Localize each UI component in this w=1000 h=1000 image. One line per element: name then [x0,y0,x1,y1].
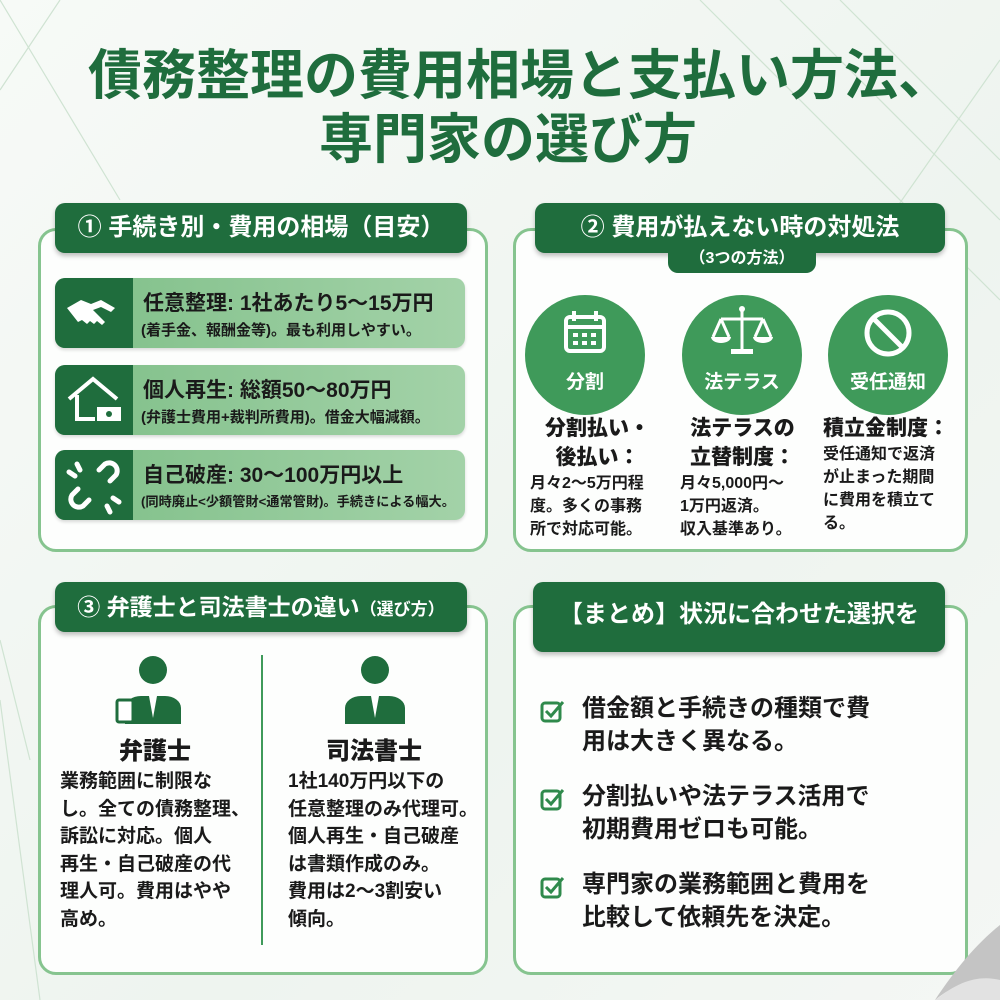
text: 分割払い: 月々2〜5万円程 [530,475,644,492]
checklist item 1: 借金額と手続きの種類で費 [582,695,870,722]
icon: 法テラス: 法テラス [704,372,780,393]
text: 弁護士: し。全ての債務整理、 [60,798,250,820]
row: 個人再生 [55,365,465,435]
text: 法テラス: 1万円返済。 [680,498,769,515]
checklist item 3 [540,871,870,931]
heading 2 [535,203,945,253]
title: 専門家の選び方 [319,110,697,170]
heading 3: ③ 弁護士と司法書士の違い（選び方） [77,594,445,620]
panel: cannot pay [513,228,968,552]
checklist item 2: 分割払いや法テラス活用で [582,783,870,810]
text: 法テラス: 法テラスの [690,417,795,440]
row: 個人再生: 個人再生: 総額50〜80万円 [143,379,392,402]
icon: 受任通知 [828,295,948,415]
text: 弁護士: 理人可。費用はやや [60,881,231,902]
text: 積立金: る。 [823,515,855,532]
checklist item 1 [540,695,870,755]
heading 2 sub tab: （3つの方法） [690,250,794,267]
row: 自己破産: 自己破産: 30〜100万円以上 [143,464,403,487]
row: 個人再生: (弁護士費用+裁判所費用)。借金大幅減額。 [141,409,430,426]
text: 法テラス: 立替制度： [690,446,795,469]
text: 弁護士: 再生・自己破産の代 [60,854,231,874]
icon: scrivener [345,656,405,724]
text: 法テラス: 月々5,000円〜 [680,475,784,492]
text: 司法書士: 費用は2〜3割安い [288,881,442,902]
icon: 法テラス [682,295,802,415]
checklist item 2: 初期費用ゼロも可能。 [582,816,822,843]
divider [261,655,263,945]
text: 分割払い: 所で対応可能。 [530,521,642,538]
title [88,46,952,170]
panel: cost by procedure [38,228,488,552]
text: 弁護士: 訴訟に対応。個人 [60,826,212,847]
icon: 分割 [525,295,645,415]
checklist item 3: 専門家の業務範囲と費用を [582,871,870,898]
text: 積立金 [823,416,949,532]
text: 司法書士: 1社140万円以下の [288,771,444,792]
heading 1 [55,203,467,253]
text: 司法書士: 傾向。 [288,908,345,930]
text: 積立金: が止まった期間 [823,469,934,486]
text: 弁護士: 弁護士 [119,738,191,765]
heading 4 [533,582,945,652]
heading 3 [55,582,467,632]
text: 弁護士: 業務範囲に制限な [60,771,212,792]
text: 法テラス [680,416,795,538]
row: 自己破産: (同時廃止<少額管財<通常管財)。手続きによる幅大。 [141,494,455,509]
text: 司法書士: は書類作成のみ。 [288,854,440,874]
page curl [935,925,1000,1000]
heading 1: ① 手続き別・費用の相場（目安） [78,214,444,241]
text: 分割払い: 度。多くの事務 [530,498,642,515]
row: 自己破産 [55,450,465,520]
row: 任意整理 [55,278,465,348]
row: 任意整理: 任意整理: 1社あたり5〜15万円 [143,292,434,315]
row: 任意整理: (着手金、報酬金等)。最も利用しやすい。 [141,322,421,339]
text: 分割払い: 分割払い・ [545,417,650,440]
text: 分割払い: 後払い： [556,446,640,469]
text: 司法書士: 個人再生・自己破産 [288,826,459,847]
text: 司法書士 [288,738,478,930]
icon: lawyer [116,656,181,724]
heading 4: 【まとめ】状況に合わせた選択を [559,601,919,628]
icon: 受任通知: 受任通知 [850,372,926,393]
checklist item 1: 用は大きく異なる。 [582,728,798,755]
text: 法テラス: 収入基準あり。 [680,521,792,538]
text: 司法書士: 任意整理のみ代理可。 [288,798,478,820]
checklist item 2 [540,783,870,843]
checklist item 3: 比較して依頼先を決定。 [582,904,845,931]
heading 2 sub tab [668,248,816,273]
text: 積立金: 受任通知で返済 [823,446,935,463]
text: 積立金: 積立金制度： [823,417,949,440]
text: 弁護士 [60,738,250,930]
text: 司法書士: 司法書士 [326,738,422,765]
panel: summary [513,605,968,975]
text: 積立金: に費用を積立て [823,492,935,509]
icon: 分割: 分割 [566,372,604,393]
title: 債務整理の費用相場と支払い方法、 [88,46,952,106]
text: 弁護士: 高め。 [60,908,117,930]
panel: lawyer vs scrivener [38,605,488,975]
text: 分割払い [530,416,650,538]
heading 2: ② 費用が払えない時の対処法 [581,214,899,241]
